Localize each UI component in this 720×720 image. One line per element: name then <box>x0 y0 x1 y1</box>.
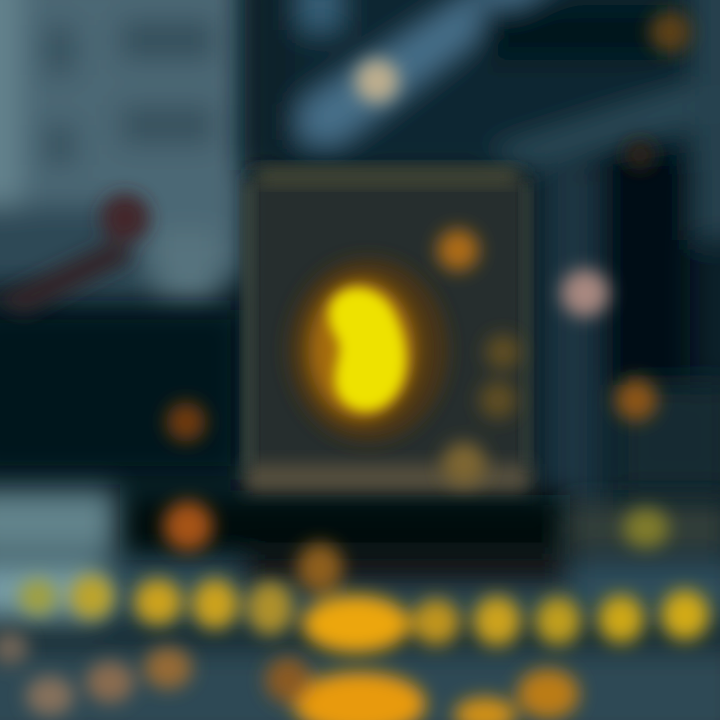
panel: chip casing <box>244 168 530 492</box>
icons: orange chip lights <box>163 11 691 551</box>
icons: row of yellow lights <box>19 508 709 653</box>
background: dark upper centre and right <box>245 0 720 520</box>
background: bottom floor <box>0 490 720 720</box>
icons: pale and red lights <box>0 59 609 317</box>
background: building upper left <box>0 0 245 305</box>
icons: bottom amber lights <box>0 631 579 720</box>
background: black band left <box>0 310 570 560</box>
icon: glowing yellow core <box>288 258 448 442</box>
